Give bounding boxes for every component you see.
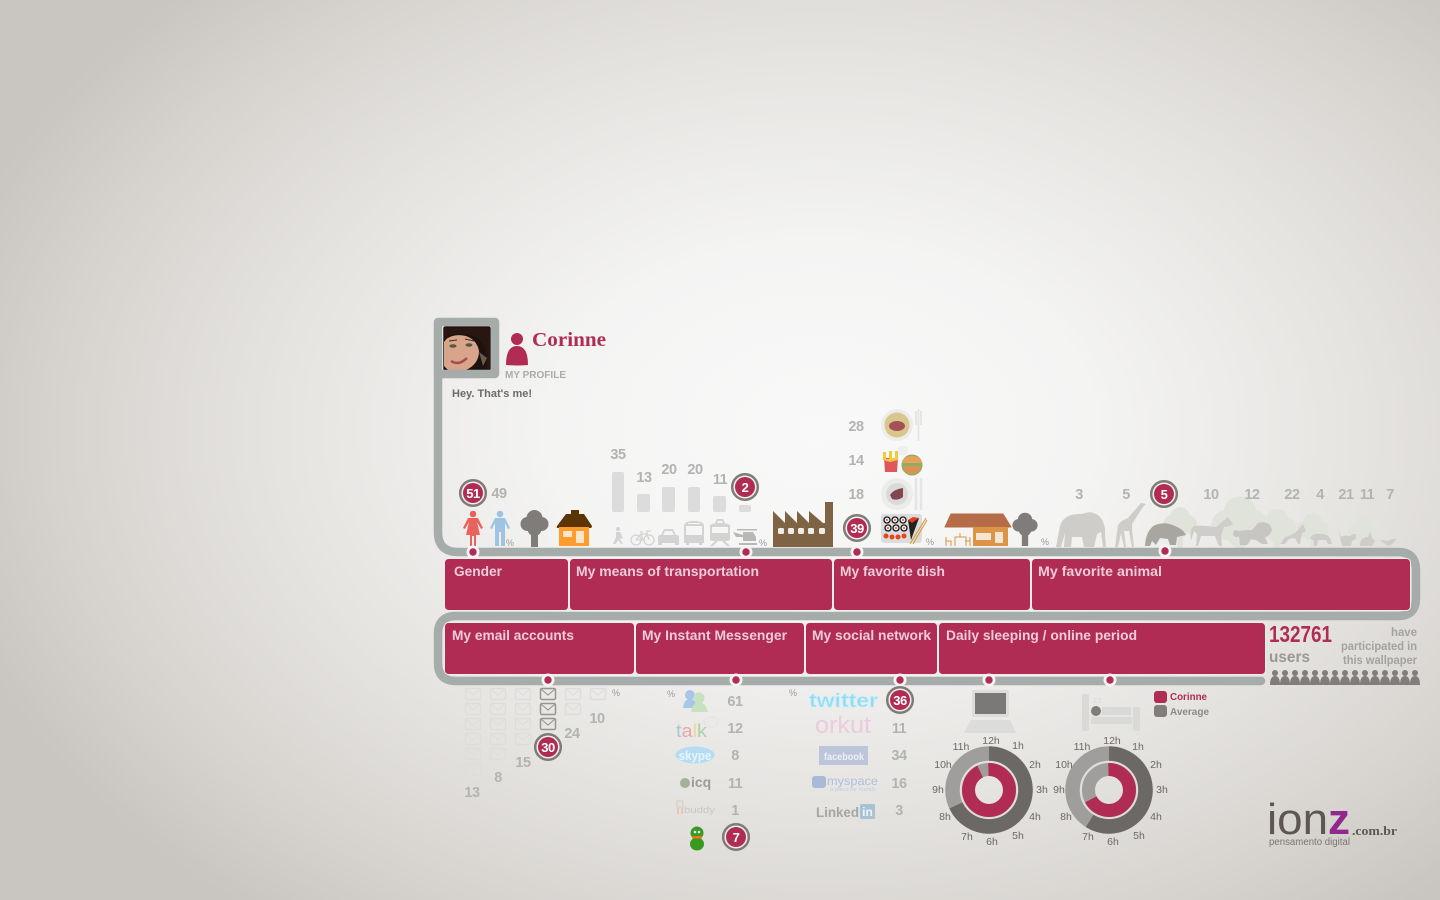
participation text xyxy=(1341,627,1418,667)
values: 21 xyxy=(1338,487,1354,503)
icon: sushi xyxy=(881,514,927,544)
icon: car xyxy=(658,529,679,545)
logo: talk: talk xyxy=(676,721,708,741)
hour labels: 2h xyxy=(1029,759,1041,771)
icon: bus xyxy=(684,521,704,545)
icon: bird xyxy=(1380,539,1397,546)
icon: bicycle xyxy=(631,531,654,545)
values: 11 xyxy=(713,472,728,488)
values: 3 xyxy=(1075,487,1083,503)
panel: instant messenger xyxy=(667,689,743,850)
donut chart: average online xyxy=(952,754,1026,826)
donut chart: Corinne sleep xyxy=(1081,762,1137,818)
hour labels: 9h xyxy=(932,784,944,796)
profile frame and timeline track xyxy=(438,322,1416,681)
icon: laptop xyxy=(964,690,1016,733)
icon: bear xyxy=(1145,523,1186,546)
hour labels: 5h xyxy=(1012,830,1024,842)
values: 8 xyxy=(731,748,739,764)
donut chart: Corinne online xyxy=(961,762,1017,818)
values: 20 xyxy=(687,462,703,478)
name: Corinne xyxy=(532,329,606,351)
category labels: My favorite animal xyxy=(1038,563,1162,579)
timeline markers xyxy=(466,544,1172,686)
icon: factory xyxy=(773,502,833,547)
logo: ionz: pensamento digital xyxy=(1269,837,1350,848)
hour labels: 6h xyxy=(986,836,998,848)
percent: % xyxy=(789,688,797,698)
circled highlight values: 2 xyxy=(742,480,749,495)
participation stats xyxy=(1269,621,1420,685)
logo: buddy: buddy xyxy=(684,805,716,815)
logo: orkut: orkut xyxy=(815,712,871,739)
logo: twitter: twitter xyxy=(809,691,879,712)
values: 28 xyxy=(848,419,864,435)
values: 22 xyxy=(1284,487,1300,503)
icon: duck xyxy=(690,826,704,850)
logo: buddy xyxy=(677,801,716,815)
hour labels: 1h xyxy=(1132,741,1144,753)
hour labels xyxy=(932,735,1048,848)
values xyxy=(891,721,907,819)
participation text: participated in xyxy=(1341,641,1417,653)
logo: icq: icq xyxy=(691,774,711,790)
percent: % xyxy=(667,689,675,699)
values: 4 xyxy=(1316,487,1324,503)
panel: sleeping period xyxy=(1053,694,1168,848)
values: 11 xyxy=(728,776,743,792)
panel: social network xyxy=(789,688,907,820)
icon: tree xyxy=(1012,513,1038,546)
hour labels: 8h xyxy=(1060,811,1072,823)
hour labels: 8h xyxy=(939,811,951,823)
logo: ionz: ion xyxy=(1267,795,1328,844)
legend: Corinne xyxy=(1170,692,1207,703)
values: % xyxy=(759,538,767,548)
values: 7 xyxy=(1386,487,1394,503)
values: 16 xyxy=(891,776,907,792)
circled highlight values: 39 xyxy=(850,521,864,536)
hour labels: 12h xyxy=(1103,735,1121,747)
icon: pedestrian xyxy=(613,527,623,544)
hour labels: 4h xyxy=(1150,811,1162,823)
icon: fast food xyxy=(883,446,922,476)
hour labels: 11h xyxy=(953,741,970,753)
icon: woman xyxy=(463,511,483,546)
icon: giraffe xyxy=(1115,503,1146,547)
category labels: Gender xyxy=(454,563,503,579)
hour labels: 7h xyxy=(1082,831,1094,843)
hour labels: 10h xyxy=(1055,759,1073,771)
hour labels: 3h xyxy=(1156,784,1168,796)
hour labels: 3h xyxy=(1036,784,1048,796)
icon: lion xyxy=(1233,522,1272,545)
values: 12 xyxy=(727,721,743,737)
panel: favorite animal xyxy=(1056,489,1397,548)
values: % xyxy=(926,537,934,547)
circled highlight values: 30 xyxy=(541,740,555,755)
background trees xyxy=(1163,496,1326,548)
icon: elephant xyxy=(1056,512,1106,547)
values xyxy=(464,688,620,801)
logo: linkedin: Linked xyxy=(816,804,859,820)
values: 14 xyxy=(848,453,864,469)
icon: rabbit xyxy=(1360,531,1375,546)
logo: ionz: z xyxy=(1328,795,1350,844)
icon: bed: zz xyxy=(1093,695,1102,705)
category bars xyxy=(444,558,1410,674)
values: 11 xyxy=(892,721,907,737)
profile photo xyxy=(442,326,492,372)
values: 5 xyxy=(1122,487,1130,503)
icon: horse xyxy=(1190,517,1233,546)
category labels: My social network xyxy=(812,627,931,643)
bar chart xyxy=(612,472,751,512)
logo: icq xyxy=(680,774,711,790)
values xyxy=(727,694,743,819)
values: 3 xyxy=(895,803,903,819)
logo: talk xyxy=(676,717,718,741)
category labels: My favorite dish xyxy=(840,563,945,579)
icon: msn xyxy=(683,690,708,712)
circled highlight values xyxy=(460,474,1177,850)
hour labels: 7h xyxy=(961,831,973,843)
hour labels: 4h xyxy=(1029,811,1041,823)
users label: users xyxy=(1269,649,1310,666)
hour labels: 6h xyxy=(1107,836,1119,848)
icon: tram xyxy=(710,519,730,546)
values xyxy=(1075,487,1394,503)
icon: restaurant xyxy=(945,514,1011,546)
icon: steak plate xyxy=(881,478,921,510)
icon: tree xyxy=(520,510,548,547)
category labels: My email accounts xyxy=(452,627,574,643)
logo: myspace xyxy=(812,774,878,793)
values: 1 xyxy=(731,803,739,819)
values xyxy=(610,447,767,548)
email icons xyxy=(466,688,606,774)
panel: online period xyxy=(932,690,1048,848)
category labels xyxy=(452,563,1162,643)
profile label: MY PROFILE xyxy=(505,369,566,381)
hour labels: 10h xyxy=(934,759,952,771)
values: 15 xyxy=(515,755,531,771)
logo: skype: skype xyxy=(678,748,712,763)
panel: gender: % xyxy=(506,538,514,548)
hour labels: 9h xyxy=(1053,784,1065,796)
icon: wolf xyxy=(1280,524,1306,544)
profile heading xyxy=(452,329,606,400)
category labels: Daily sleeping / online period xyxy=(946,627,1137,643)
people icons xyxy=(1270,670,1420,685)
values: 11 xyxy=(1360,487,1375,503)
icon: hippo xyxy=(1310,534,1332,546)
values: 12 xyxy=(1244,487,1260,503)
gender average: 49 xyxy=(491,486,507,502)
profile message: Hey. That's me! xyxy=(452,388,532,400)
icon: helicopter xyxy=(733,529,757,545)
hour labels: 5h xyxy=(1133,830,1145,842)
values: 13 xyxy=(636,470,652,486)
hour labels: 1h xyxy=(1012,740,1024,752)
values xyxy=(848,419,934,547)
legend xyxy=(1154,691,1209,718)
panel: email accounts xyxy=(464,688,620,801)
circled highlight values: 7 xyxy=(733,830,740,845)
values: 20 xyxy=(661,462,677,478)
hour labels: 2h xyxy=(1150,759,1162,771)
values: 24 xyxy=(564,726,580,742)
values: 61 xyxy=(727,694,743,710)
circled highlight values: 36 xyxy=(893,693,907,708)
logo: ionz xyxy=(1267,795,1397,848)
hour labels xyxy=(1053,735,1168,848)
infographic xyxy=(434,318,1420,851)
selected email icons xyxy=(540,688,556,730)
category labels: My Instant Messenger xyxy=(642,627,788,643)
donut chart: average sleep xyxy=(1072,754,1146,826)
participation text: this wallpaper xyxy=(1343,655,1418,667)
icon: man xyxy=(490,511,510,546)
user count: 132761 xyxy=(1269,621,1332,647)
logo: facebook: facebook xyxy=(824,751,864,763)
hour labels: 12h xyxy=(982,735,1000,747)
panel: transportation xyxy=(610,447,767,548)
logo: myspace: myspace xyxy=(827,774,878,788)
category labels: My means of transportation xyxy=(576,563,759,579)
values: 34 xyxy=(891,748,907,764)
logo: myspace: a place for friends xyxy=(830,787,876,793)
icon: cat xyxy=(1338,527,1356,546)
values: 10 xyxy=(589,711,605,727)
legend: Average xyxy=(1170,707,1209,718)
values: 13 xyxy=(464,785,480,801)
logo: ionz: .com.br xyxy=(1352,823,1397,838)
panel: favorite dish xyxy=(773,409,1049,547)
circled highlight values: 5 xyxy=(1161,487,1168,502)
hour labels: 11h xyxy=(1074,741,1091,753)
panel: gender xyxy=(463,486,592,548)
logo: linkedin: in xyxy=(862,805,873,819)
values: 10 xyxy=(1203,487,1219,503)
icon: bed xyxy=(1082,694,1140,731)
icon: house xyxy=(557,510,592,546)
participation text: have xyxy=(1391,627,1417,639)
circled highlight values: 51 xyxy=(466,486,480,501)
values: 35 xyxy=(610,447,626,463)
percent: % xyxy=(1041,537,1049,547)
icon: pasta plate xyxy=(881,409,921,441)
values: 18 xyxy=(848,487,864,503)
icon: person xyxy=(506,333,528,366)
values: 8 xyxy=(494,770,502,786)
values: % xyxy=(612,688,620,698)
